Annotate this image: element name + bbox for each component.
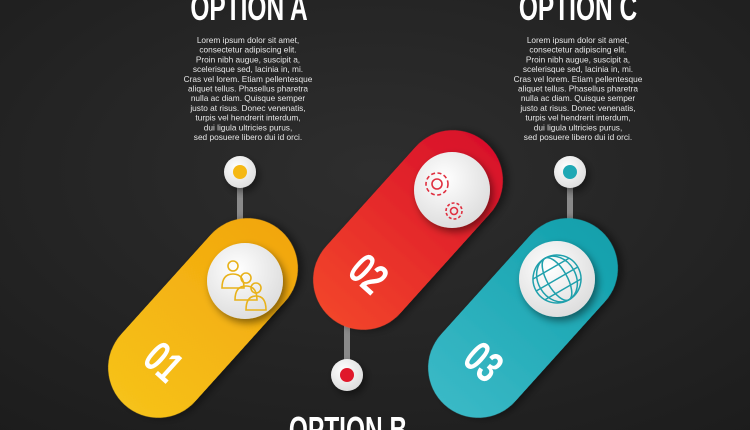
text block: option A: nulla ac diam. Quisque semper bbox=[191, 93, 305, 103]
text block: option A: Proin nibh augue, suscipit a, bbox=[196, 54, 300, 64]
text block: option C: consectetur adipiscing elit. bbox=[529, 45, 627, 55]
connector: option B bbox=[331, 310, 363, 391]
text block: option A: Cras vel lorem. Etiam pellentesque bbox=[184, 74, 313, 84]
text block: option A: scelerisque sed, lacinia in, mi. bbox=[193, 64, 303, 74]
icon circle: people bbox=[207, 243, 283, 319]
text block: option A: Lorem ipsum dolor sit amet, bbox=[197, 35, 299, 45]
text block: option C: scelerisque sed, lacinia in, mi. bbox=[523, 64, 633, 74]
text block: option C: Cras vel lorem. Etiam pellentesque bbox=[514, 74, 643, 84]
number 02: 02 bbox=[339, 245, 397, 304]
connector: option A bbox=[224, 156, 256, 235]
text block: option C: dui ligula ultricies purus, bbox=[534, 122, 622, 132]
text block: option C: Lorem ipsum dolor sit amet, bbox=[527, 35, 629, 45]
text block: option C bbox=[514, 35, 643, 142]
text block: option A: justo at risus. Donec venenatis, bbox=[189, 103, 306, 113]
text block: option A: dui ligula ultricies purus, bbox=[204, 122, 292, 132]
connector: option C bbox=[554, 156, 586, 235]
pill 01 yellow bbox=[88, 198, 318, 430]
icon circle: globe bbox=[519, 241, 595, 317]
text block: option A bbox=[184, 35, 313, 142]
pill 02 red bbox=[293, 110, 523, 350]
text block: option A: consectetur adipiscing elit. bbox=[199, 45, 297, 55]
text block: option A: sed posuere libero dui id orci. bbox=[194, 132, 302, 142]
text block: option C: Proin nibh augue, suscipit a, bbox=[526, 54, 630, 64]
text block: option C: justo at risus. Donec venenatis, bbox=[519, 103, 636, 113]
text block: option C: turpis vel hendrerit interdum, bbox=[525, 113, 631, 123]
number 03: 03 bbox=[454, 333, 512, 392]
text block: option A: aliquet tellus. Phasellus pharetra bbox=[188, 84, 308, 94]
text block: option C: nulla ac diam. Quisque semper bbox=[521, 93, 635, 103]
number 01: 01 bbox=[134, 333, 192, 392]
pill 03 teal bbox=[408, 198, 638, 430]
text block: option C: aliquet tellus. Phasellus pharetra bbox=[518, 84, 638, 94]
text block: option A: turpis vel hendrerit interdum, bbox=[195, 113, 301, 123]
icon circle: gears bbox=[414, 152, 490, 228]
text block: option C: sed posuere libero dui id orci. bbox=[524, 132, 632, 142]
